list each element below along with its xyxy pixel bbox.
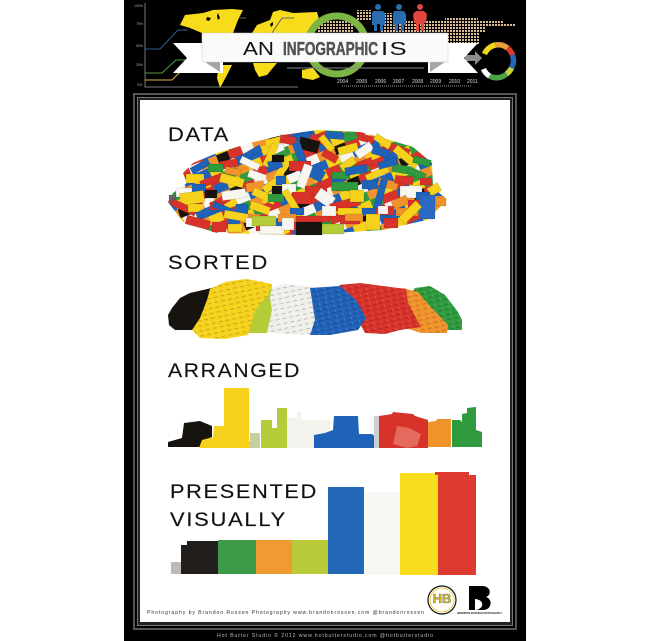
heading: presented visually: PRESENTED xyxy=(170,482,318,503)
logo: Brandon Rossen: BRANDON ROSSEN PHOTOGRAPHY xyxy=(457,611,502,615)
logo: HB xyxy=(428,586,456,614)
brick bar chart xyxy=(171,472,476,575)
yellow world map xyxy=(180,9,320,88)
ribbon left tail xyxy=(173,43,223,73)
ribbon right tail xyxy=(428,43,478,73)
white bar xyxy=(365,492,400,575)
photo credit: Photography by Brandon Rossen Photography www.brandonrossen.com @brandonrossen xyxy=(147,610,424,616)
orange bar xyxy=(256,540,293,574)
title text: AN xyxy=(243,39,274,59)
white stack xyxy=(287,412,330,448)
white pile xyxy=(265,284,317,335)
axis labels: 100% xyxy=(134,4,143,8)
data brick pile xyxy=(168,130,447,235)
yellow pile xyxy=(192,279,272,339)
black bar xyxy=(181,541,222,574)
timeline years: 2010 xyxy=(449,79,460,85)
black pile xyxy=(168,287,216,330)
loose red bricks xyxy=(393,426,421,448)
white panel xyxy=(140,100,510,622)
axis labels: 0% xyxy=(137,83,142,87)
title text: INFOGRAPHIC xyxy=(283,39,378,59)
gray-lime block xyxy=(250,433,260,448)
red bar xyxy=(435,472,476,575)
gray bar xyxy=(171,562,181,574)
timeline years: 2008 xyxy=(412,79,423,85)
timeline years: 2004 xyxy=(337,79,348,85)
orange pile xyxy=(395,288,448,333)
axis labels: 25% xyxy=(136,63,143,67)
axis labels: 75% xyxy=(136,22,143,26)
yellow stack xyxy=(199,388,255,448)
heading: data: DATA xyxy=(168,125,230,146)
axis labels: 50% xyxy=(136,44,143,48)
map gaps xyxy=(206,13,273,27)
gray edge block xyxy=(374,416,380,448)
heading: presented visually xyxy=(170,482,318,531)
heading: arranged: ARRANGED xyxy=(168,361,301,382)
timeline years: 2009 xyxy=(430,79,441,85)
ring chart xyxy=(484,45,514,78)
logo: HB: HB xyxy=(433,591,451,606)
lime stack xyxy=(261,408,287,448)
footer credit: Hot Butter Studio © 2012 www.hotbutterstudio.com @hotbutterstudio xyxy=(217,632,433,639)
red stack xyxy=(379,412,428,448)
banner panel xyxy=(202,33,448,62)
timeline years xyxy=(337,79,478,83)
frame xyxy=(133,93,517,630)
timeline years: 2007 xyxy=(393,79,404,85)
red pile xyxy=(339,283,421,334)
lime pile xyxy=(246,285,272,333)
blue stack xyxy=(314,416,385,448)
yellow bar xyxy=(400,473,438,575)
timeline years: 2005 xyxy=(356,79,367,85)
people icons xyxy=(372,4,427,31)
arranged brick stacks xyxy=(168,388,482,448)
title banner xyxy=(173,33,478,73)
dot world map xyxy=(317,10,515,45)
timeline years: 2006 xyxy=(375,79,386,85)
blue bar xyxy=(328,487,364,574)
arrow xyxy=(465,51,482,65)
header graphic xyxy=(134,3,515,88)
left line chart xyxy=(145,3,472,87)
green pile xyxy=(411,286,462,330)
lime bar xyxy=(292,540,328,574)
green bar xyxy=(218,540,256,574)
axis labels xyxy=(134,4,143,87)
orange stack xyxy=(428,419,451,447)
blue pile xyxy=(310,286,366,335)
heading: sorted: SORTED xyxy=(168,253,269,274)
green ring xyxy=(308,16,366,74)
sorted brick piles xyxy=(168,279,462,339)
title text: IS xyxy=(381,39,408,59)
poster background xyxy=(124,0,526,641)
timeline years: 2011 xyxy=(467,79,478,85)
logo: Brandon Rossen xyxy=(457,586,502,615)
black stack xyxy=(168,421,212,447)
green stack xyxy=(452,407,482,447)
heading: presented visually: VISUALLY xyxy=(170,510,287,531)
